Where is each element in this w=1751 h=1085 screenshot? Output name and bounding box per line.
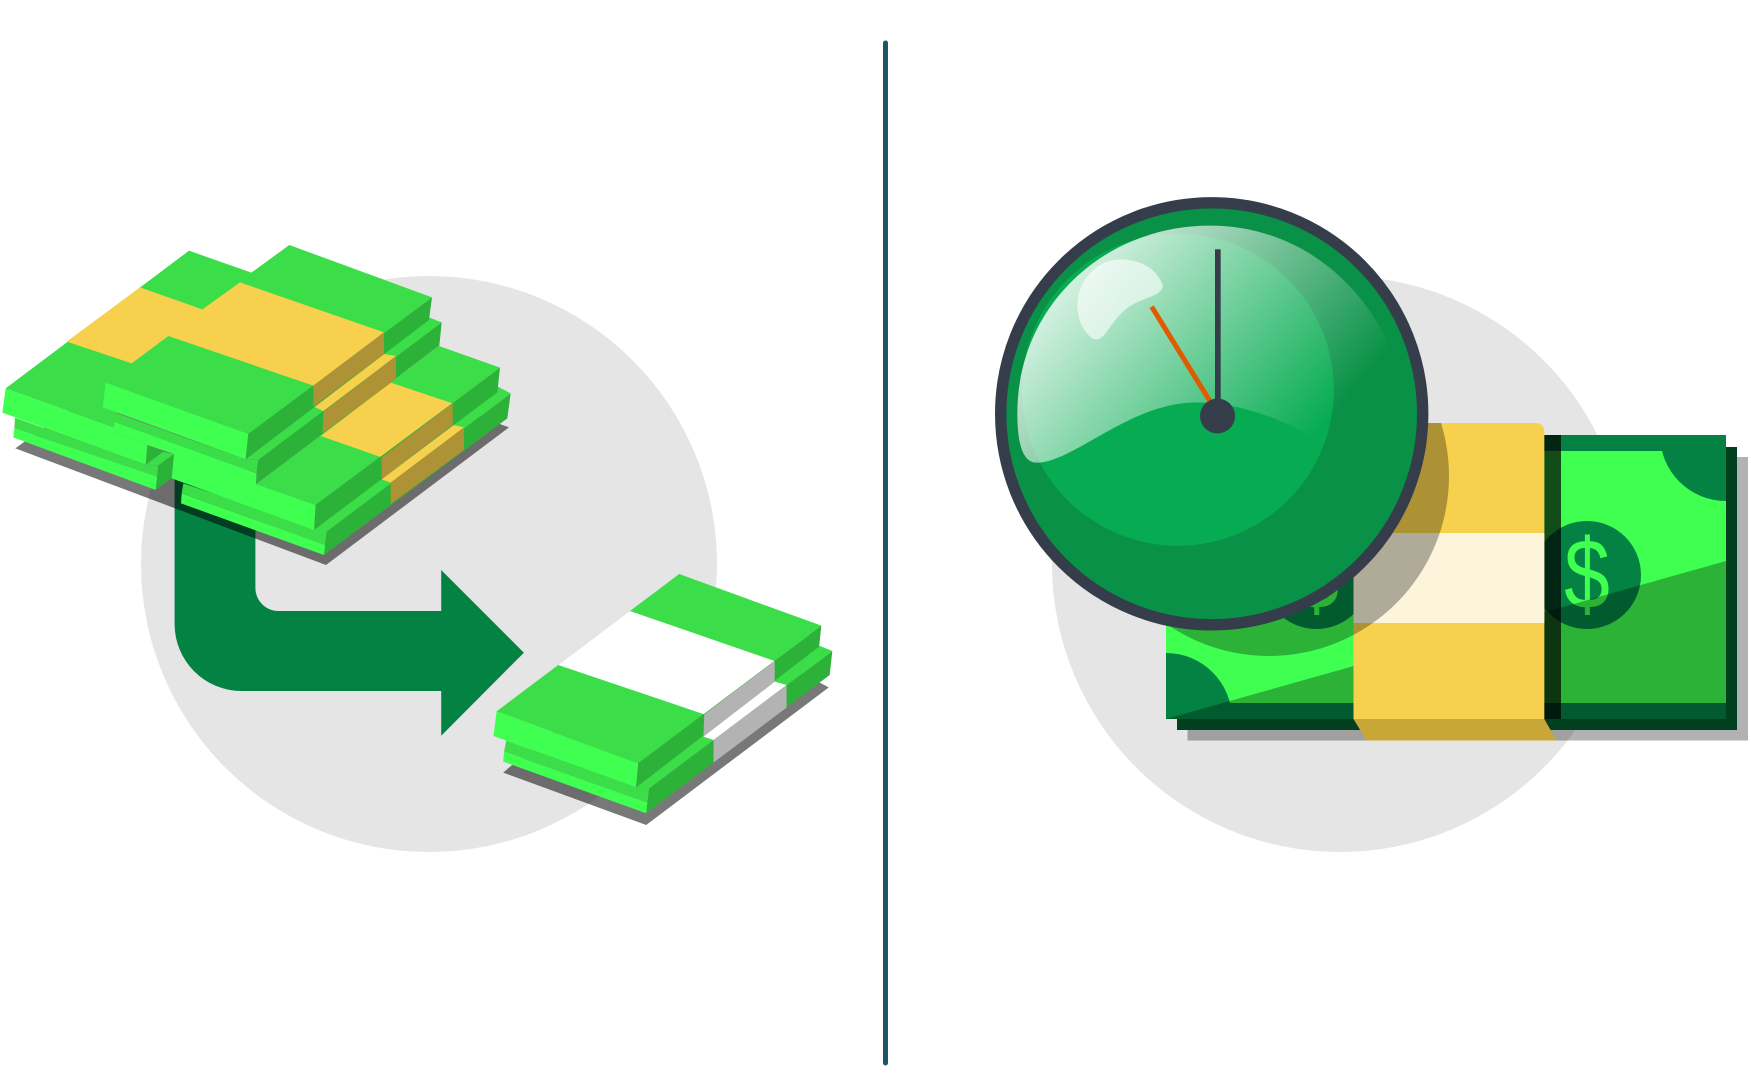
lower bill <box>503 646 832 813</box>
background circle: left <box>141 276 717 852</box>
banknote cast shadow <box>1188 457 1748 740</box>
gloss highlight <box>1077 259 1163 339</box>
clock <box>1001 203 1423 625</box>
clock shadow on banknote <box>1170 423 1449 656</box>
front banknote: $ <box>1564 520 1610 630</box>
middle bundle <box>114 317 442 530</box>
right bundle upper bill <box>256 346 500 530</box>
minute hand <box>1215 249 1221 409</box>
arrow: from large stack to small stack <box>175 470 524 736</box>
clock face <box>1001 203 1423 625</box>
lower left bundle <box>13 418 174 490</box>
clock hub <box>1200 398 1235 433</box>
small money bundle with white band <box>494 574 832 825</box>
hour hand <box>1152 307 1212 404</box>
back banknote <box>1177 447 1737 730</box>
glass gloss <box>1017 226 1390 463</box>
stack shadow <box>15 313 509 565</box>
upper bill <box>494 574 821 787</box>
lower right bundle <box>181 386 511 555</box>
front banknote <box>1166 435 1726 719</box>
front banknote: $ <box>1294 520 1339 630</box>
large money stack <box>2 245 511 565</box>
inner face disc <box>1022 234 1334 546</box>
banknote bundle with paper band <box>1166 423 1748 740</box>
paper band <box>1354 423 1556 740</box>
back bill front face <box>2 388 147 465</box>
background circle: right <box>1052 276 1628 852</box>
top surface of top bills with yellow band <box>6 245 432 459</box>
vertical divider <box>883 43 888 1063</box>
small bundle shadow <box>503 613 829 825</box>
